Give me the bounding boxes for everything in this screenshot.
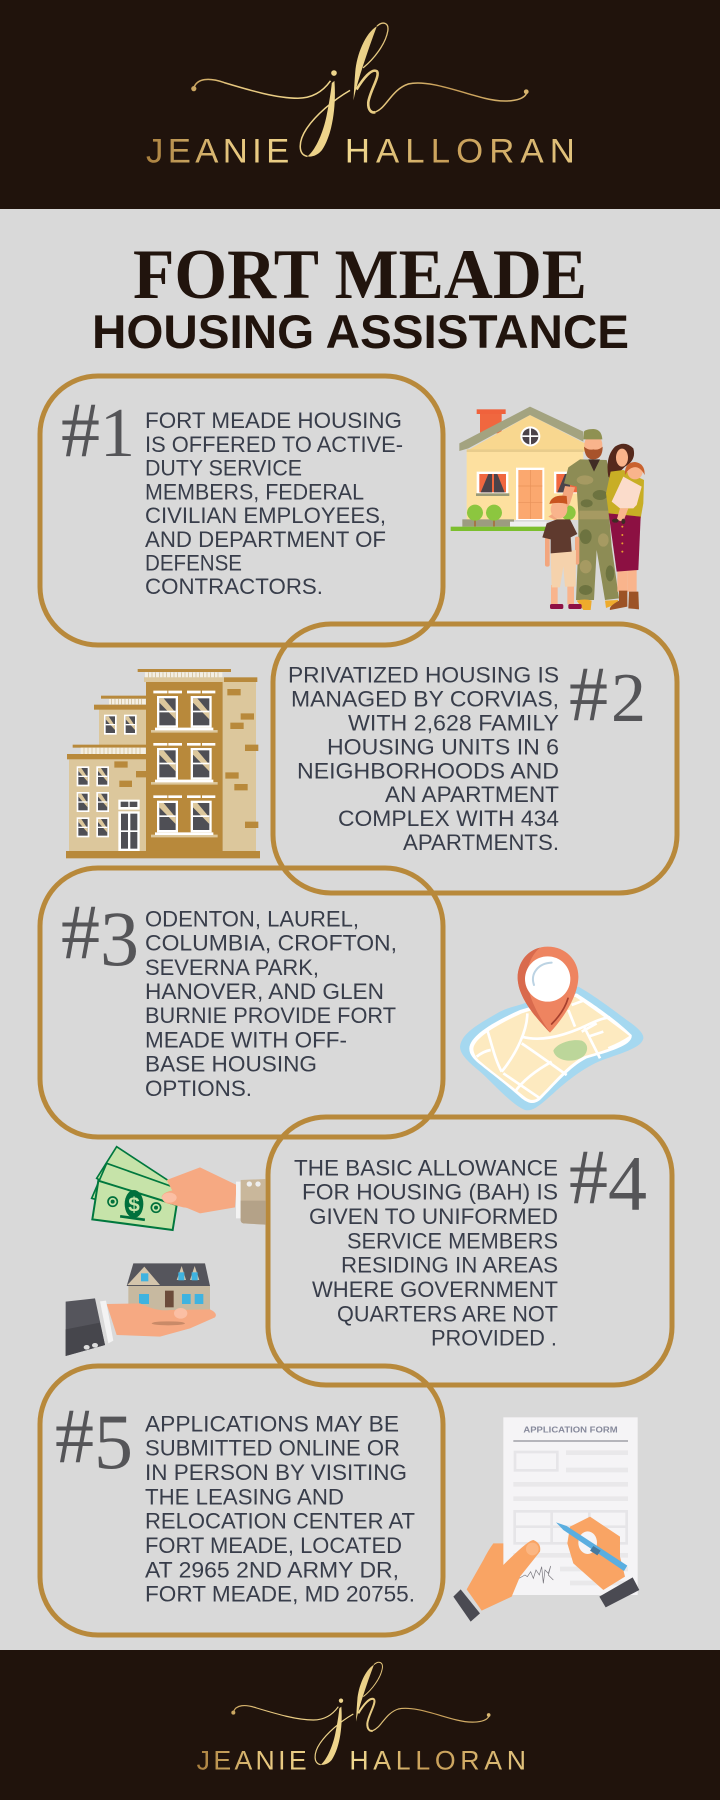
text block: step 1: [145, 408, 403, 599]
number: #4: 4: [608, 1140, 647, 1227]
footer band: [0, 1650, 720, 1800]
text block: step 4: QUARTERS ARE NOT: [337, 1301, 558, 1326]
text block: step 1: FORT MEADE HOUSING: [145, 408, 402, 433]
number: #2: #: [569, 650, 608, 737]
number: #5: 5: [94, 1398, 133, 1485]
footer logo: [197, 1662, 526, 1775]
text block: step 3: OPTIONS.: [145, 1076, 252, 1101]
text block: step 2: WITH 2,628 FAMILY: [348, 711, 559, 736]
text block: step 1: IS OFFERED TO ACTIVE-: [145, 432, 403, 457]
text block: step 3: COLUMBIA, CROFTON,: [145, 930, 397, 956]
text block: step 5: AT 2965 2ND ARMY DR,: [145, 1557, 399, 1582]
panel: step 5 outline: [40, 1366, 443, 1635]
panel: step 2 outline: [273, 624, 677, 893]
text block: step 1: MEMBERS, FEDERAL: [145, 479, 364, 504]
text block: step 3: MEADE WITH OFF-: [145, 1028, 347, 1052]
number: #1: #: [61, 386, 100, 473]
text block: step 2: MANAGED BY CORVIAS,: [291, 687, 559, 712]
subtitle: Housing Assistance: HOUSING ASSISTANCE: [92, 305, 629, 358]
number: #2: 2: [611, 660, 646, 737]
text block: step 1: DEFENSE: [145, 550, 242, 575]
text block: step 2: APARTMENTS.: [403, 830, 559, 855]
text block: step 5: [145, 1411, 415, 1607]
panel: step 4 outline: [268, 1117, 672, 1385]
header logo: [146, 23, 575, 170]
illustration: application form being signed: [453, 1417, 639, 1622]
panel: step 3 outline: [40, 868, 443, 1137]
text block: step 3: HANOVER, AND GLEN: [145, 979, 384, 1004]
header logo: JEANIE: [146, 132, 289, 170]
text block: step 5: FORT MEADE, LOCATED: [145, 1533, 402, 1558]
text block: step 4: GIVEN TO UNIFORMED: [309, 1204, 558, 1229]
text block: step 1: CONTRACTORS.: [145, 574, 323, 599]
text block: step 2: AN APARTMENT: [385, 782, 559, 807]
text block: step 4: FOR HOUSING (BAH) IS: [302, 1180, 558, 1205]
footer logo: HALLORAN: [349, 1745, 526, 1775]
number: #4: #: [569, 1133, 608, 1220]
text block: step 2: PRIVATIZED HOUSING IS: [288, 663, 559, 688]
text block: step 5: THE LEASING AND: [145, 1484, 344, 1509]
text block: step 2: COMPLEX WITH 434: [338, 806, 559, 831]
panel: step 1 outline: [40, 376, 443, 645]
footer logo: JEANIE: [197, 1745, 307, 1775]
text block: step 2: NEIGHBORHOODS AND: [297, 759, 559, 784]
number: #3: 3: [100, 895, 139, 982]
text block: step 5: FORT MEADE, MD 20755.: [145, 1582, 415, 1607]
text block: step 1: AND DEPARTMENT OF: [145, 527, 386, 552]
illustration: hand with cash and hand with house: $: [128, 1193, 140, 1216]
text block: step 3: ODENTON, LAUREL,: [145, 906, 359, 931]
header band: [0, 0, 720, 209]
text block: step 4: RESIDING IN AREAS: [341, 1253, 558, 1278]
text block: step 3: [145, 906, 397, 1101]
illustration: apartment building: [66, 669, 260, 858]
number: #5: #: [55, 1392, 94, 1479]
text block: step 4: [294, 1155, 558, 1351]
text block: step 5: SUBMITTED ONLINE OR: [145, 1436, 400, 1461]
text block: step 2: HOUSING UNITS IN 6: [327, 735, 559, 760]
number: #3: #: [61, 888, 100, 975]
text block: step 1: CIVILIAN EMPLOYEES,: [145, 503, 386, 528]
text block: step 4: PROVIDED .: [431, 1326, 557, 1351]
number: #1: 1: [100, 395, 135, 472]
illustration: hand with cash and hand with house: [66, 1147, 266, 1356]
text block: step 5: APPLICATIONS MAY BE: [145, 1411, 399, 1436]
title: Fort Meade: FORT MEADE: [133, 236, 587, 314]
text block: step 4: SERVICE MEMBERS: [347, 1228, 558, 1253]
illustration: application form being signed: APPLICATION FORM: [523, 1424, 618, 1434]
text block: step 4: WHERE GOVERNMENT: [312, 1277, 558, 1302]
text block: step 5: RELOCATION CENTER AT: [145, 1509, 415, 1534]
header logo: HALLORAN: [345, 132, 575, 170]
text block: step 3: SEVERNA PARK,: [145, 955, 319, 980]
text block: step 4: THE BASIC ALLOWANCE: [294, 1155, 558, 1180]
illustration: map with location pin: [460, 947, 643, 1110]
text block: step 5: IN PERSON BY VISITING: [145, 1460, 407, 1485]
text block: step 1: DUTY SERVICE: [145, 456, 302, 481]
text block: step 3: BURNIE PROVIDE FORT: [145, 1003, 396, 1028]
illustration: family and house: [451, 407, 645, 610]
text block: step 3: BASE HOUSING: [145, 1052, 317, 1077]
text block: step 2: [288, 663, 559, 855]
